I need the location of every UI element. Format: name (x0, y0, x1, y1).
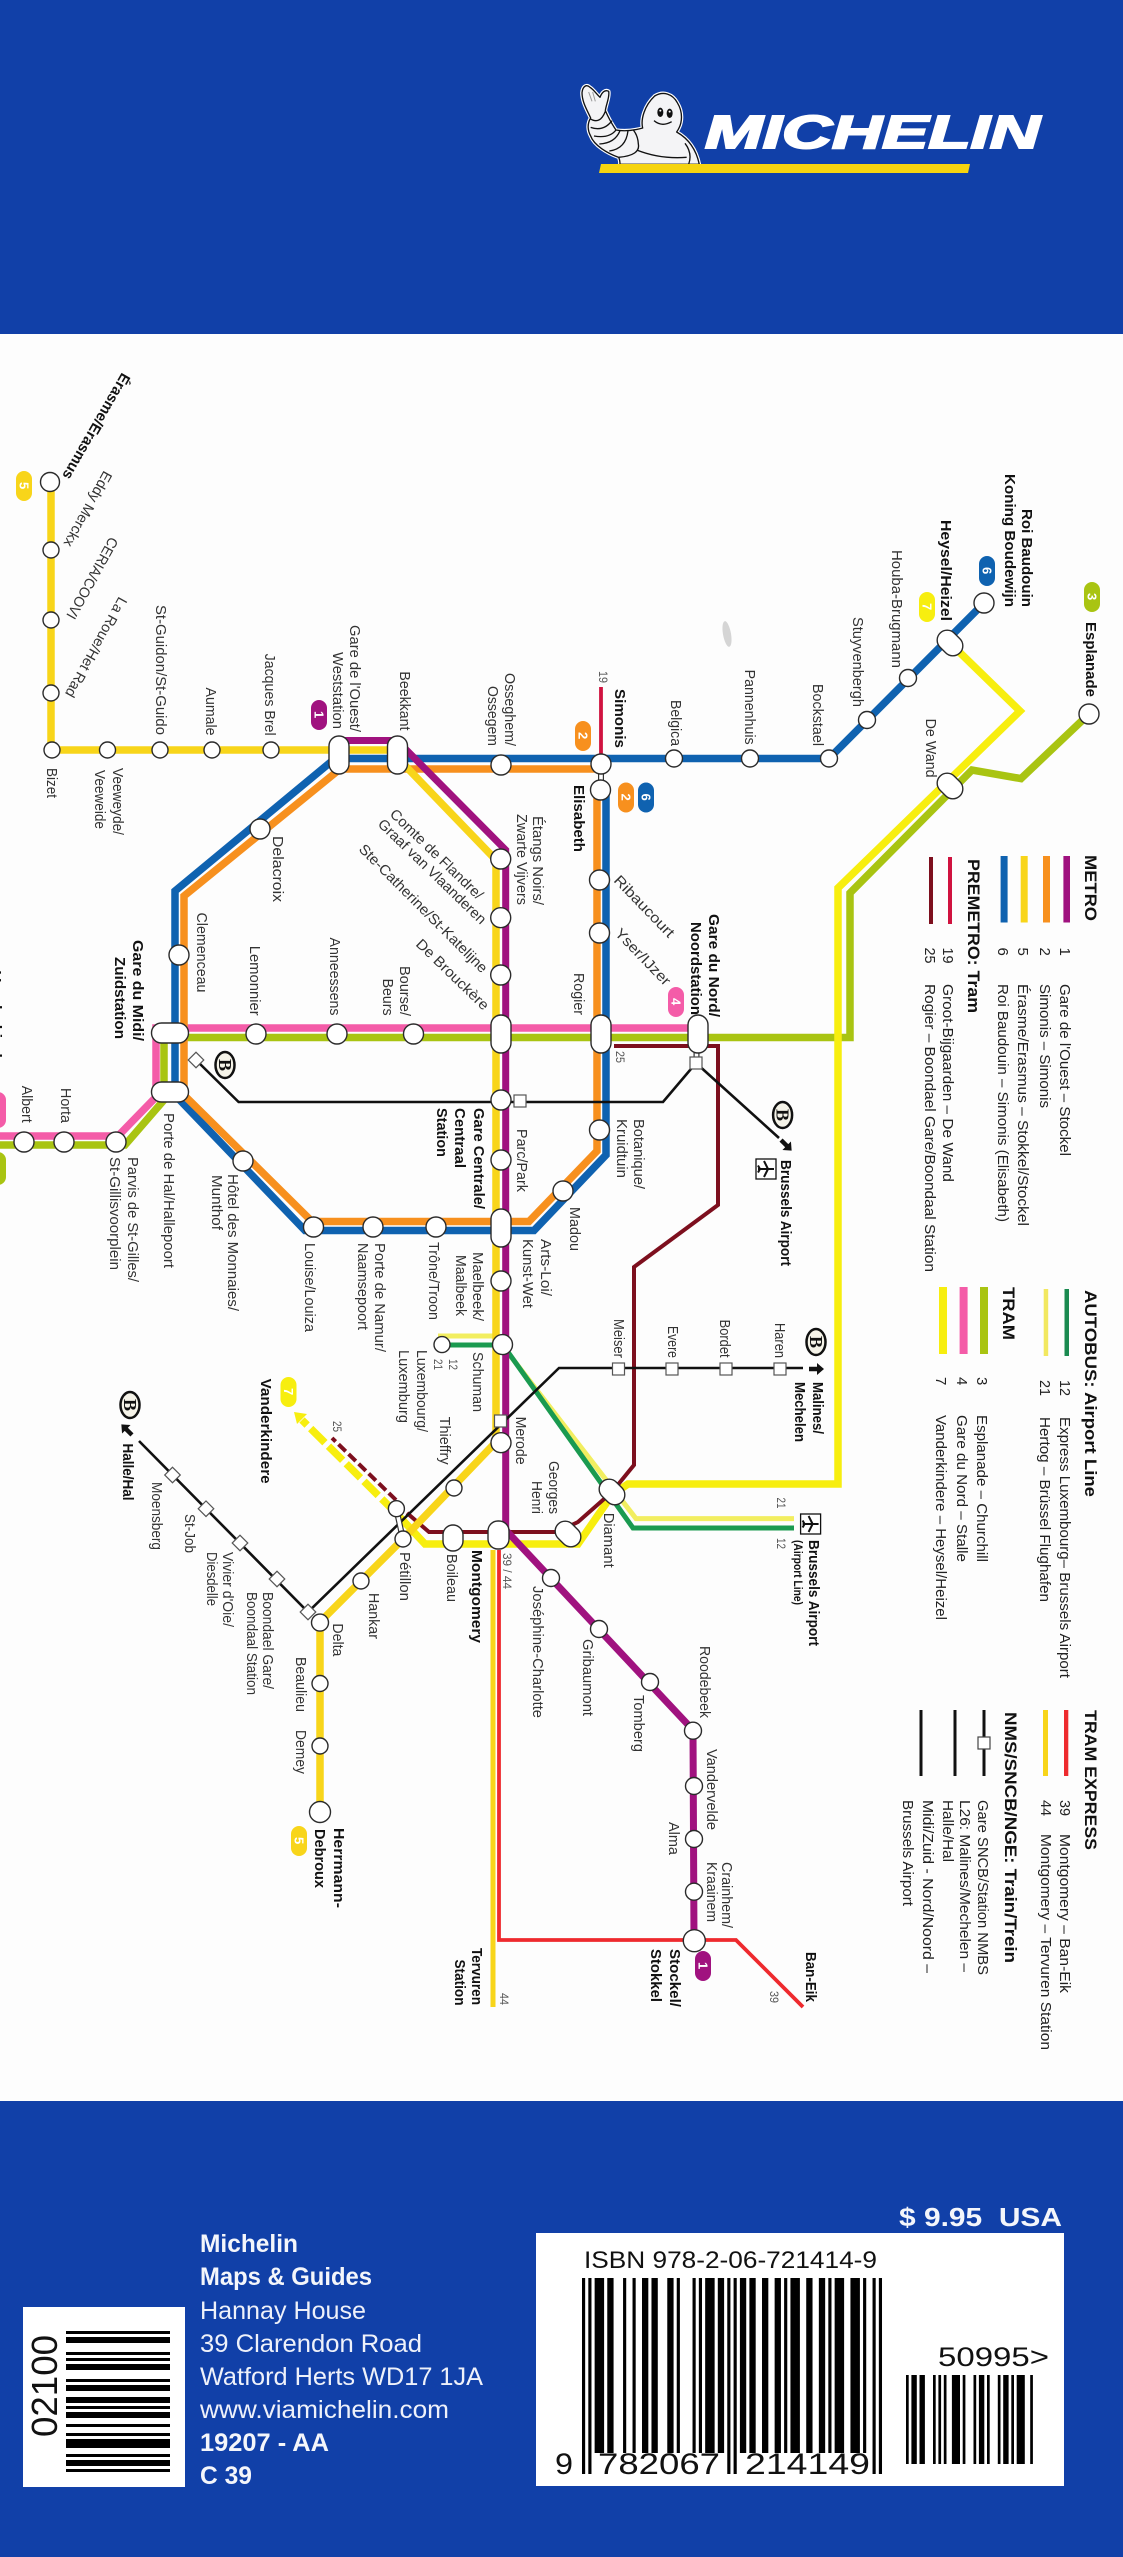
line: tram 44 (490, 1550, 496, 2007)
link inner: Petillon (397, 1512, 402, 1535)
icons: railway B badges: B (215, 1059, 235, 1071)
station labels: south-east and south: 44 (497, 1993, 509, 2006)
station labels: north-west branch: Eddy Merckx (59, 468, 114, 550)
station labels: centre diagonal and north: Stuyvenbergh (849, 617, 865, 707)
EAN-13 bars (582, 2278, 882, 2474)
legend: autobus and tram (932, 1287, 1100, 1679)
legend: metro and premetro: Simonis – Simonis (1036, 984, 1053, 1108)
station labels: west and south ring: Gare Centrale/ (470, 1108, 487, 1210)
station labels: south-east and south: Roodebeek (696, 1646, 712, 1719)
station labels: south-east and south: Beaulieu (292, 1657, 308, 1712)
station labels: west and south ring: Lemonnier (246, 946, 262, 1016)
station labels: centre diagonal and north: De Wand (922, 719, 938, 778)
publisher address block: Watford Herts WD17 1JA (200, 2363, 483, 2391)
station labels: west and south ring: Luxemburg (395, 1350, 411, 1423)
publisher address block: Michelin (200, 2230, 298, 2258)
station labels: west and south ring: Mechelen (791, 1382, 808, 1442)
station labels: south-east and south: Stokkel (647, 1949, 664, 2002)
station labels: south-east and south: Delta (329, 1623, 345, 1657)
station labels: centre diagonal and north: Ste-Catherine/St-Katelijne (355, 842, 490, 977)
line: premetro 19 (599, 687, 603, 764)
station labels: west and south ring: Schuman (469, 1352, 485, 1412)
station labels: centre diagonal and north: Pannenhuis (741, 670, 757, 745)
station labels: south-east and south: Vanderkindere (257, 1379, 274, 1484)
legend: metro and premetro: 6 (994, 948, 1011, 956)
station labels: south-east and south: 25 (330, 1421, 342, 1432)
station labels: centre diagonal and north: Simonis (611, 689, 628, 748)
station labels: west and south ring: St-Gillisvoorplein (106, 1157, 122, 1270)
station labels: south-east and south: Kraainem (703, 1862, 719, 1922)
station labels: south-east and south: Diesdelle (203, 1552, 219, 1606)
legend: metro and premetro: 25 (921, 948, 938, 964)
station labels: west and south ring: Albert (18, 1086, 34, 1123)
station labels: north-west branch: Aumale (202, 688, 218, 736)
legend: metro and premetro: PREMETRO: Tram (964, 859, 983, 1013)
station labels: north-west branch: La Roue/Het Rad (61, 594, 129, 700)
station labels: west and south ring: Kruidtuin (613, 1119, 629, 1178)
legend: tram express and train (899, 1710, 1100, 2050)
station labels: south-east and south: Moensberg (148, 1482, 164, 1550)
station labels: west and south ring: 25 (613, 1051, 625, 1063)
station labels: west and south ring: Brussels Airport (777, 1160, 794, 1266)
icons: railway B badges: B (806, 1336, 826, 1348)
station labels: west and south ring: Madou (566, 1207, 582, 1251)
line number badges: 7 (281, 1388, 296, 1395)
station labels: centre diagonal and north: Houba-Brugmann (888, 550, 904, 668)
station labels: south-east and south: Tomberg (630, 1695, 646, 1752)
station labels: south-east and south: 39 (767, 1991, 779, 2003)
station labels: west and south ring: Clemenceau (193, 912, 209, 992)
legend: autobus and tram: 12 (1056, 1380, 1073, 1396)
station labels: north-west branch: Bizet (43, 768, 59, 798)
station labels: centre diagonal and north: Elisabeth (570, 785, 587, 852)
link: Petillon (397, 1512, 402, 1535)
station labels: west and south ring: (Airport Line) (791, 1540, 803, 1605)
line: premetro 25 dashed (332, 1438, 396, 1500)
legend: metro and premetro (921, 855, 1100, 1272)
line: tram 39 (499, 1550, 803, 2007)
station labels: centre diagonal and north: Rogier (570, 973, 586, 1015)
legend: tram express and train: Montgomery – Ban-Eik (1056, 1834, 1073, 1994)
legend: tram express and train: 44 (1037, 1800, 1054, 1816)
station labels: west and south ring: Munthof (208, 1175, 224, 1231)
line number badges: 1 (696, 1962, 710, 1969)
station labels: south-east and south: Stockel/ (666, 1949, 683, 2008)
station labels: west and south ring: Botanique/ (630, 1119, 646, 1190)
legend: autobus and tram: 3 (973, 1377, 990, 1385)
station labels: west and south ring: Horta (57, 1088, 73, 1124)
station labels: west and south ring: 21 (431, 1359, 443, 1370)
publisher address block: 39 Clarendon Road (200, 2330, 422, 2358)
station labels: south-east and south: Montgomery (468, 1550, 485, 1644)
icons: railway B badges (120, 1052, 826, 1418)
station labels: north-west branch: Ossegem (484, 686, 500, 746)
station labels: south-east and south: Vivier d'Oie/ (219, 1552, 235, 1628)
station labels: west and south ring: Meiser (610, 1319, 626, 1358)
line: premetro 25 (407, 1046, 718, 1532)
legend: metro and premetro: Groot-Bijgaarden – De Wand (939, 984, 956, 1182)
line number badges: 2 (576, 732, 590, 739)
station labels: centre diagonal and north: Heysel/Heizel (937, 520, 954, 621)
station labels: west and south ring: 12 (446, 1359, 458, 1370)
station labels: south-east and south: 39 / 44 (500, 1553, 512, 1590)
icons: airport plane boxes (756, 1159, 821, 1534)
station labels: west and south ring: Bourse/ (396, 966, 412, 1017)
publisher address block: 19207 - AA (200, 2429, 329, 2457)
train stations: squares and diamonds (165, 1052, 786, 1620)
station labels: centre diagonal and north: Koning Boudewijn (1001, 474, 1018, 607)
station labels: centre diagonal and north: Belgica (667, 700, 683, 747)
line number badges: 2 (618, 794, 634, 801)
legend: autobus and tram: TRAM (999, 1287, 1018, 1340)
line: tram 7 dashed section (302, 1420, 396, 1513)
line: metro 1 purple (339, 740, 694, 1941)
line: metro 6 blue (175, 603, 984, 1230)
logo wordmark: MICHELIN (705, 106, 1041, 158)
legend: tram express and train: L26: Malines/Mechelen – (956, 1800, 973, 1973)
station labels: south-east and south: Diamant (600, 1513, 616, 1568)
station labels: south-east and south: Alma (665, 1822, 681, 1856)
publisher address block: www.viamichelin.com (199, 2396, 449, 2424)
station labels: south-east and south: Henri (528, 1481, 544, 1514)
small barcode label: 02100 (24, 2335, 65, 2437)
ISBN barcode label: 50995> (938, 2342, 1049, 2372)
ISBN barcode label (536, 2233, 1064, 2486)
legend: tram express and train: Halle/Hal (939, 1800, 956, 1862)
station labels: south-east and south: Debroux (311, 1829, 328, 1889)
line number badges: 5 (292, 1837, 306, 1844)
station labels: north-west branch: Veeweyde/ (109, 768, 125, 836)
station labels: west and south ring: Zuidstation (111, 957, 128, 1039)
publisher address block: Maps & Guides (200, 2263, 372, 2291)
station labels: centre diagonal and north: Roi Baudouin (1018, 509, 1035, 607)
station labels: west and south ring: Parvis de St-Gilles/ (124, 1157, 140, 1283)
publisher address block (199, 2230, 483, 2490)
station labels: west and south ring: Maelbeek/ (469, 1252, 485, 1322)
station labels: west and south ring: Bordet (716, 1320, 732, 1358)
station labels: north-west branch: Osseghem/ (501, 673, 517, 747)
legend: tram express and train: Gare SNCB/Station NMBS (974, 1800, 991, 1975)
station labels: north-west branch: Beekkant (396, 671, 412, 730)
station labels: north-west branch: St-Guidon/St-Guido (152, 605, 168, 735)
legend: tram express and train: Midi/Zuid - Nord/Noord – (919, 1800, 936, 1974)
line: metro 5 yellow (51, 482, 496, 1812)
legend: tram express and train: TRAM EXPRESS (1081, 1710, 1100, 1850)
station labels: centre diagonal and north: Yser/IJzer (611, 926, 673, 989)
stations: metro and tram circles (14, 472, 1099, 1952)
arrows: train directions (117, 1136, 824, 1439)
legend: autobus and tram: Vanderkindere – Heysel/Heizel (932, 1415, 949, 1620)
station labels: south-east and south: Boondaal Station (243, 1592, 259, 1695)
station labels: north-west branch (43, 370, 517, 903)
station labels: west and south ring: Malines/ (809, 1382, 826, 1435)
station labels: west and south ring: Anneessens (326, 938, 342, 1016)
station labels: centre diagonal and north: Noordstation (687, 922, 704, 1015)
line number badges (0, 471, 1100, 1981)
legend: metro and premetro: Érasme/Erasmus – Stokkel/Stockel (1014, 984, 1031, 1226)
station labels: south-east and south: Merode (512, 1417, 528, 1465)
link inner: Simonis to Elisabeth (599, 770, 603, 786)
station labels: west and south ring: Station (433, 1108, 450, 1157)
line number badges: 7 (920, 603, 934, 610)
station labels: centre diagonal and north: Esplanade (1082, 622, 1099, 697)
legend: autobus and tram: Gare du Nord – Stalle (953, 1415, 970, 1562)
top blue band (0, 0, 1123, 334)
station labels: south-east and south: Demey (292, 1730, 308, 1775)
station labels: south-east and south (119, 1379, 819, 2008)
line: tram 3 green (0, 714, 1089, 1145)
line number badges: 4 (668, 998, 684, 1006)
station labels: south-east and south: Halle/Hal (119, 1444, 136, 1500)
station labels: west and south ring: 12 (774, 1538, 786, 1549)
publisher address block: C 39 (200, 2462, 252, 2490)
legend: metro and premetro: 5 (1014, 948, 1031, 956)
station labels: west and south ring: Gare du Midi/ (129, 940, 146, 1042)
line number badges: 6 (638, 794, 654, 801)
station labels: south-east and south: Tervuren (468, 1948, 485, 2005)
legend: metro and premetro: 1 (1056, 948, 1073, 956)
station labels: west and south ring: Louise/Louiza (301, 1243, 317, 1333)
ISBN barcode label: 782067 (598, 2448, 720, 2481)
station labels: north-west branch: Veeweide (91, 770, 107, 829)
line: train Halle Mechelen (139, 1368, 803, 1612)
station labels: west and south ring: Arts-Loi/ (537, 1239, 553, 1297)
station labels: west and south ring: Maalbeek (452, 1255, 468, 1317)
legend: autobus and tram: 21 (1036, 1380, 1053, 1396)
legend: autobus and tram: Esplanade – Churchill (973, 1415, 990, 1562)
legend: autobus and tram: Hertog – Brüssel Flughafen (1036, 1417, 1053, 1602)
station labels: west and south ring: Centraal (451, 1108, 468, 1168)
station labels: north-west branch: Érasme/Erasmus (59, 370, 133, 482)
line: tram 4 pink (0, 1028, 698, 1136)
station labels: centre diagonal and north: Gare du Nord/ (705, 914, 722, 1018)
station labels: west and south ring: Kunst-Wet (519, 1239, 535, 1308)
icon: bibendum mascot (582, 86, 699, 164)
station labels: west and south ring: Luxembourg/ (413, 1350, 429, 1433)
legend: metro and premetro: 19 (939, 948, 956, 964)
station labels: west and south ring: Porte de Namur/ (371, 1243, 387, 1353)
link inner: Nord to station (695, 1048, 698, 1060)
michelin logo (582, 86, 1041, 173)
station labels: north-west branch: CERIA/COOVI (62, 534, 120, 621)
legend: tram express and train: Montgomery – Tervuren Station (1037, 1834, 1054, 2050)
station labels: west and south ring (0, 912, 826, 1646)
station labels: centre diagonal and north: Zwarte Vijvers (513, 814, 529, 905)
small barcode label (23, 2307, 185, 2487)
station labels: centre diagonal and north: Graaf van Vlaanderen (374, 816, 489, 928)
station labels: centre diagonal and north: Comte de Flandre/ (386, 806, 487, 904)
station labels: south-east and south: Thieffry (436, 1417, 452, 1465)
legend: metro and premetro: METRO (1081, 855, 1100, 921)
line number badges: 1 (312, 711, 326, 718)
station labels: centre diagonal and north: De Brouckère (412, 936, 492, 1014)
station labels: west and south ring: 21 (774, 1498, 786, 1508)
station labels: west and south ring: Porte de Hal/Hallepoort (160, 1113, 176, 1268)
legend: autobus and tram: AUTOBUS: Airport Line (1081, 1290, 1100, 1497)
station labels: south-east and south: Station (451, 1960, 468, 2006)
line number badges: 6 (980, 567, 994, 574)
station labels: west and south ring: Parc/Park (513, 1129, 529, 1193)
link: Simonis to Elisabeth (598, 770, 604, 786)
station labels: south-east and south: Boondael Gare/ (259, 1592, 275, 1690)
legend: metro and premetro: 2 (1036, 948, 1053, 956)
legend: tram express and train: Brussels Airport (899, 1800, 916, 1907)
station labels: south-east and south: Joséphine-Charlotte (529, 1586, 545, 1718)
legend: tram express and train: 39 (1056, 1800, 1073, 1816)
station labels: west and south ring: Trône/Troon (425, 1242, 441, 1320)
logo yellow bar (599, 164, 970, 173)
legend: autobus and tram: 7 (932, 1377, 949, 1385)
station labels: north-west branch: Jacques Brel (261, 654, 277, 736)
line: metro 2 orange (184, 769, 600, 1222)
legend: autobus and tram: 4 (953, 1377, 970, 1385)
line number badges: 5 (16, 482, 32, 489)
publisher address block: Hannay House (200, 2297, 366, 2325)
station labels: west and south ring: Beurs (379, 979, 395, 1016)
paper smudge (721, 621, 733, 647)
ISBN barcode label: 214149 (745, 2448, 870, 2481)
station labels: south-east and south: Boileau (443, 1554, 459, 1602)
station labels: south-east and south: Ban-Eik (802, 1952, 819, 2003)
legend: tram express and train: NMS/SNCB/NGE: Train/Trein (1001, 1712, 1020, 1963)
ISBN barcode label: 9 (555, 2448, 573, 2481)
station labels: south-east and south: St-Job (181, 1514, 197, 1553)
line number badges: 3 (1084, 593, 1100, 600)
link: Nord to station (694, 1048, 700, 1060)
arrow: tram 7 dashed end (294, 1412, 307, 1424)
legend: autobus and tram: Express Luxembourg– Brussels Airport (1056, 1417, 1073, 1679)
legend: metro and premetro: Rogier – Boondael Gare/Boondaal Station (921, 984, 938, 1272)
legend: metro and premetro: Roi Baudouin – Simonis (Elisabeth) (994, 984, 1011, 1222)
station labels: north-west branch: Delacroix (269, 836, 285, 903)
station labels: centre diagonal and north: Bockstael (809, 684, 825, 746)
station labels: centre diagonal and north: Ribaucourt (610, 873, 677, 941)
price: $ 9.95 USA (899, 2202, 1062, 2232)
station labels: centre diagonal and north: Étangs Noirs/ (529, 816, 546, 906)
station labels: south-east and south: Hankar (365, 1593, 381, 1639)
line: bus 21 (438, 1336, 794, 1519)
icons: railway B badges: B (120, 1399, 140, 1411)
station labels: south-east and south: Herrmann- (330, 1828, 347, 1908)
ISBN barcode label: ISBN 978-2-06-721414-9 (584, 2247, 877, 2274)
station labels: centre diagonal and north (355, 474, 1099, 1018)
station labels: west and south ring: Naamsepoort (354, 1243, 370, 1330)
legend: metro and premetro: Gare de l'Ouest – Stockel (1056, 984, 1073, 1156)
bottom blue band (0, 2101, 1123, 2557)
line: bus 12 (442, 1345, 794, 1528)
station labels: south-east and south: Georges (545, 1461, 561, 1514)
icons: railway B badges: B (773, 1109, 793, 1121)
station labels: south-east and south: Vandervelde (703, 1749, 719, 1830)
station labels: west and south ring: Evere (664, 1326, 680, 1358)
station labels: west and south ring: Hôtel des Monnaies/ (224, 1174, 240, 1312)
station labels: north-west branch: Weststation (329, 652, 345, 729)
transit map (0, 370, 1100, 2008)
line: train Midi Nord airport (196, 1060, 779, 1138)
station labels: north-west branch: Gare de l'Ouest/ (346, 625, 362, 733)
station labels: centre diagonal and north: 19 (596, 671, 608, 683)
line: tram 7 yellow (396, 643, 1020, 1544)
station labels: west and south ring: Haren (771, 1323, 787, 1358)
EAN-5 supplement bars (906, 2375, 1033, 2464)
station labels: south-east and south: Pétillon (396, 1552, 412, 1601)
station labels: south-east and south: Gribaumont (579, 1639, 595, 1716)
station labels: west and south ring: Brussels Airport (805, 1540, 822, 1646)
station labels: south-east and south: Crainhem/ (718, 1862, 734, 1929)
